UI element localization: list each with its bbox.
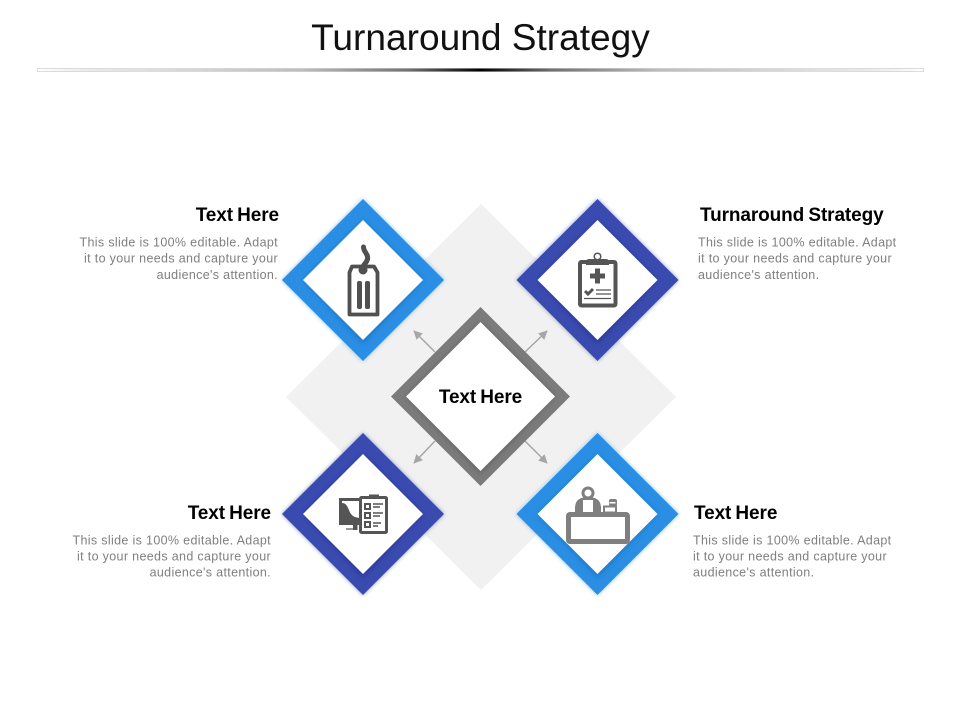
text block: top right: it to your needs and capture your — [698, 252, 892, 266]
icon: monitor and checklist — [340, 494, 386, 532]
text block: bottom left: audience's attention. — [150, 566, 271, 580]
arrow: bottom right — [525, 441, 547, 463]
center diamond — [391, 307, 570, 486]
text block: top right: This slide is 100% editable. Adapt — [698, 236, 897, 250]
text block: bottom left: Text Here — [188, 503, 271, 524]
text block: top right — [698, 205, 897, 282]
text block: bottom left — [73, 503, 271, 580]
text block: top right: audience's attention. — [698, 268, 819, 282]
text block: bottom right: Text Here — [694, 503, 777, 524]
text block: top left — [80, 205, 279, 282]
text block: bottom left: This slide is 100% editable. Adapt — [73, 534, 271, 548]
arrow: bottom left — [414, 441, 435, 463]
diamond: top left — [282, 199, 444, 361]
title divider — [37, 68, 924, 72]
text block: bottom right: This slide is 100% editable. Adapt — [693, 534, 892, 548]
center label: Text Here — [439, 387, 522, 408]
background diamond — [286, 204, 676, 590]
text block: top left: This slide is 100% editable. Adapt — [80, 236, 278, 250]
diamond: bottom left — [282, 433, 444, 595]
icon: reception desk — [568, 488, 628, 542]
diamond: top right — [516, 199, 678, 361]
arrow: top right — [525, 331, 547, 352]
text block: bottom right: it to your needs and capture your — [693, 550, 887, 564]
diamond: bottom right — [516, 433, 678, 595]
text block: top left: audience's attention. — [157, 268, 278, 282]
text block: top left: Text Here — [196, 205, 279, 226]
text block: top right: Turnaround Strategy — [700, 205, 884, 226]
title: Turnaround Strategy — [311, 16, 650, 58]
icon: medical clipboard — [580, 253, 616, 306]
text block: bottom left: it to your needs and capture your — [77, 550, 271, 564]
text block: bottom right: audience's attention. — [693, 566, 814, 580]
text block: top left: it to your needs and capture your — [84, 252, 278, 266]
icon: price tag — [350, 247, 378, 314]
arrow: top left — [414, 331, 435, 352]
text block: bottom right — [693, 503, 892, 580]
